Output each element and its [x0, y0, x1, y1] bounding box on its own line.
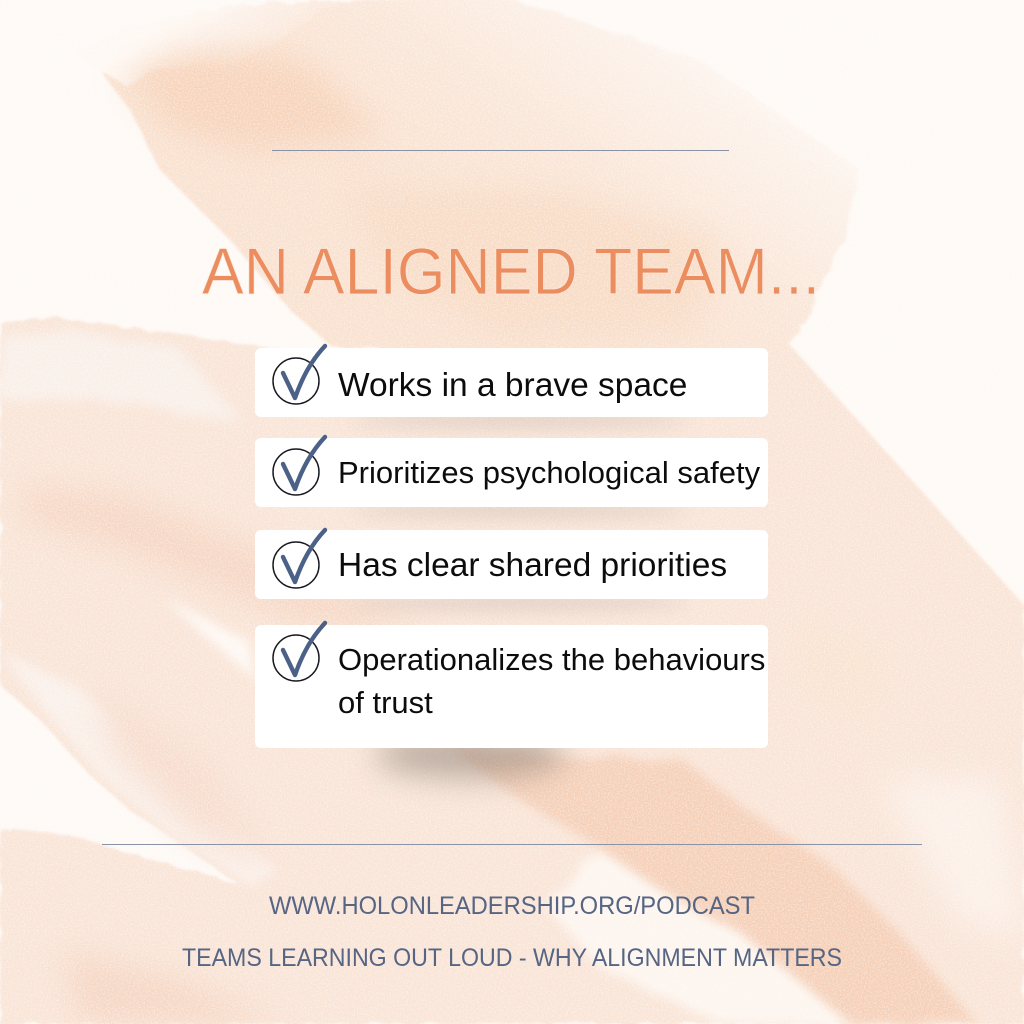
item text: operationalizes the behaviours of trust: of trust	[338, 685, 433, 720]
icon: check mark 3	[272, 528, 328, 589]
footer text: TEAMS LEARNING OUT LOUD - WHY ALIGNMENT MATTERS	[182, 944, 842, 972]
item text: prioritizes psychological safety: Prioritizes psychological safety	[338, 455, 760, 490]
icon: check mark 2	[272, 434, 328, 496]
footer text: WWW.HOLONLEADERSHIP.ORG/PODCAST	[269, 892, 755, 920]
item text: has clear shared priorities: Has clear shared priorities	[338, 547, 727, 584]
card: prioritizes psychological safety	[255, 438, 768, 507]
item text: operationalizes the behaviours of trust: Operationalizes the behaviours	[338, 642, 765, 677]
top divider line	[272, 150, 729, 151]
card: works in a brave space	[255, 348, 768, 417]
icon: check mark 1	[272, 344, 328, 405]
item text: works in a brave space: Works in a brave space	[338, 367, 687, 404]
item text: operationalizes the behaviours of trust	[338, 642, 765, 720]
card: has clear shared priorities	[255, 530, 768, 599]
card: operationalizes the behaviours of trust	[255, 625, 768, 748]
title: AN ALIGNED TEAM...	[202, 234, 820, 308]
bottom divider line	[102, 844, 922, 845]
icon: check mark 4	[272, 620, 328, 682]
